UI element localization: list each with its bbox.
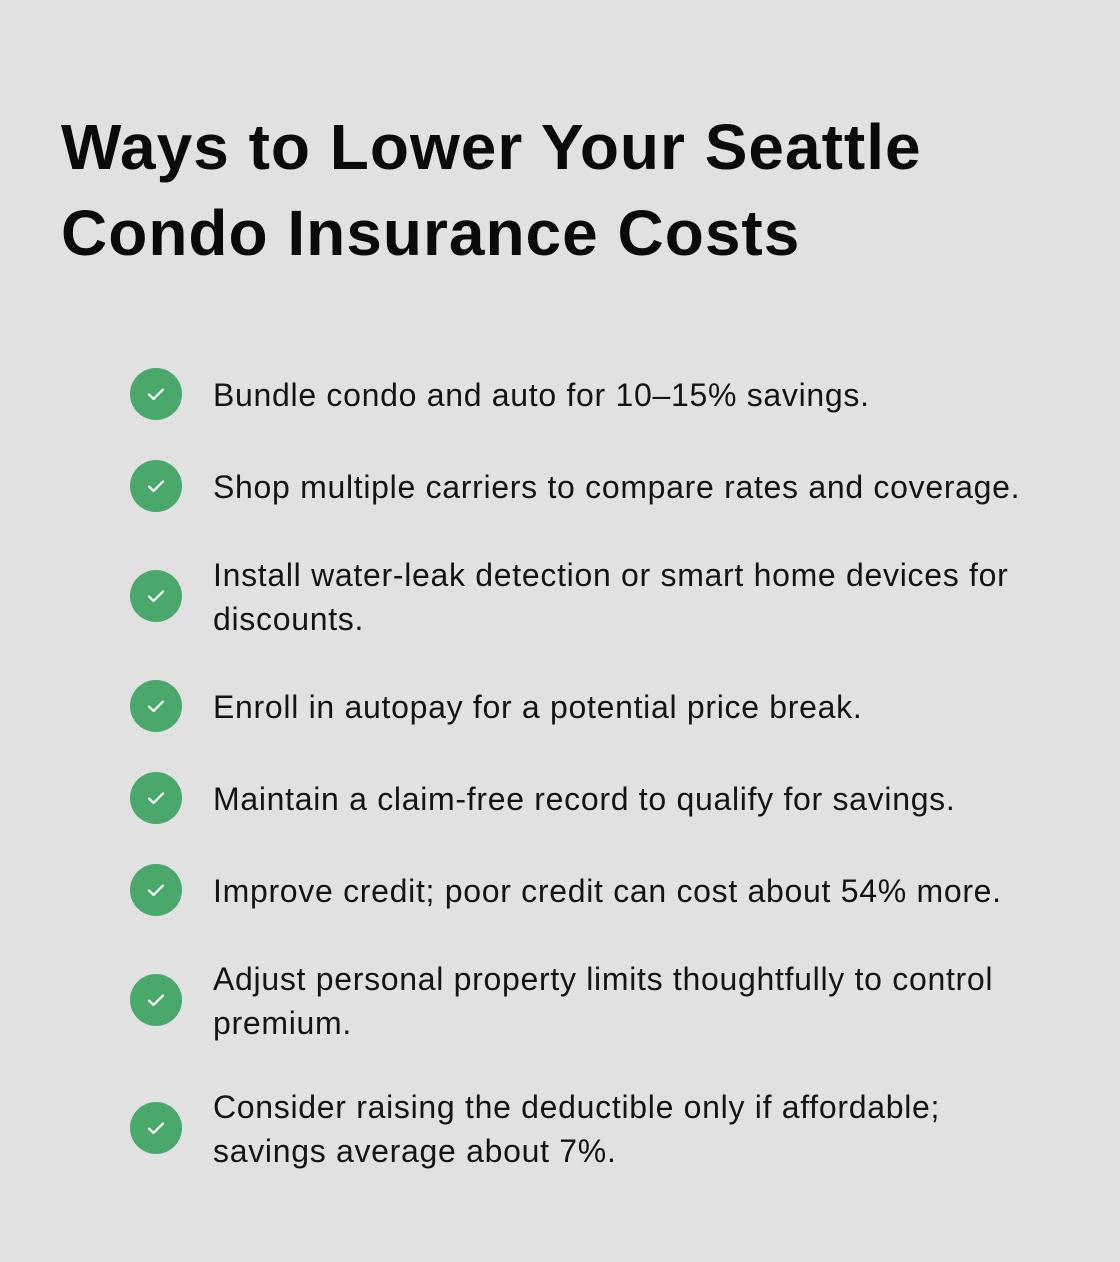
item 5 — [130, 772, 955, 824]
title: Condo Insurance Costs — [61, 197, 800, 269]
item 2 — [130, 460, 1020, 512]
text — [213, 961, 993, 1041]
icon: check — [130, 680, 182, 732]
text: premium. — [213, 1005, 352, 1041]
icon: check — [130, 1102, 182, 1154]
text — [213, 1089, 940, 1169]
icon: check — [130, 570, 182, 622]
icon: check — [130, 864, 182, 916]
text: Maintain a claim-free record to qualify for savings. — [213, 781, 955, 817]
text: discounts. — [213, 601, 364, 637]
text: Bundle condo and auto for 10–15% savings. — [213, 377, 870, 413]
item 7 — [130, 961, 993, 1041]
text: Shop multiple carriers to compare rates and coverage. — [213, 469, 1020, 505]
text: Consider raising the deductible only if affordable; — [213, 1089, 940, 1125]
icon: check — [130, 460, 182, 512]
text: Install water-leak detection or smart home devices for — [213, 557, 1008, 593]
title — [61, 111, 922, 269]
item 8 — [130, 1089, 940, 1169]
text: Adjust personal property limits thoughtfully to control — [213, 961, 993, 997]
icon: check — [130, 974, 182, 1026]
title: Ways to Lower Your Seattle — [61, 111, 922, 183]
text: Enroll in autopay for a potential price break. — [213, 689, 862, 725]
text: savings average about 7%. — [213, 1133, 617, 1169]
item 6 — [130, 864, 1002, 916]
icon: check — [130, 772, 182, 824]
item 3 — [130, 557, 1008, 637]
item 1 — [130, 368, 870, 420]
item 4 — [130, 680, 862, 732]
icon: check — [130, 368, 182, 420]
text — [213, 557, 1008, 637]
text: Improve credit; poor credit can cost about 54% more. — [213, 873, 1002, 909]
